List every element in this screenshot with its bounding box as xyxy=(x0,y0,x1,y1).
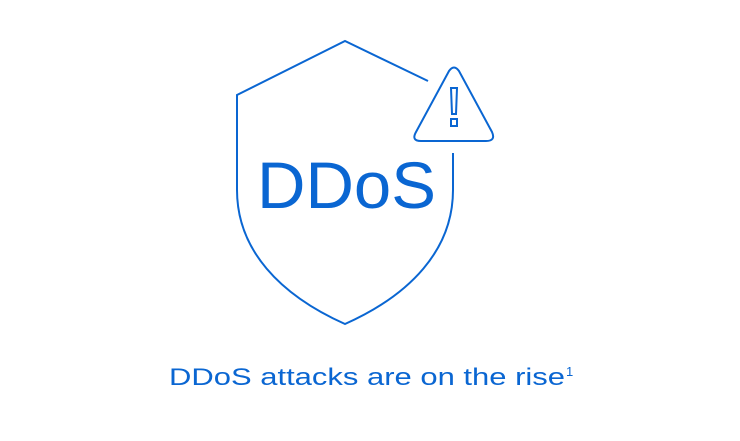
icon: shield xyxy=(237,41,453,324)
caption: DDoS attacks are on the rise xyxy=(169,364,565,391)
superscript footnote: 1 xyxy=(566,364,573,379)
heading: DDoS: DDoS xyxy=(257,148,436,222)
exclamation mark xyxy=(451,88,457,126)
icon: warning triangle xyxy=(414,68,493,141)
